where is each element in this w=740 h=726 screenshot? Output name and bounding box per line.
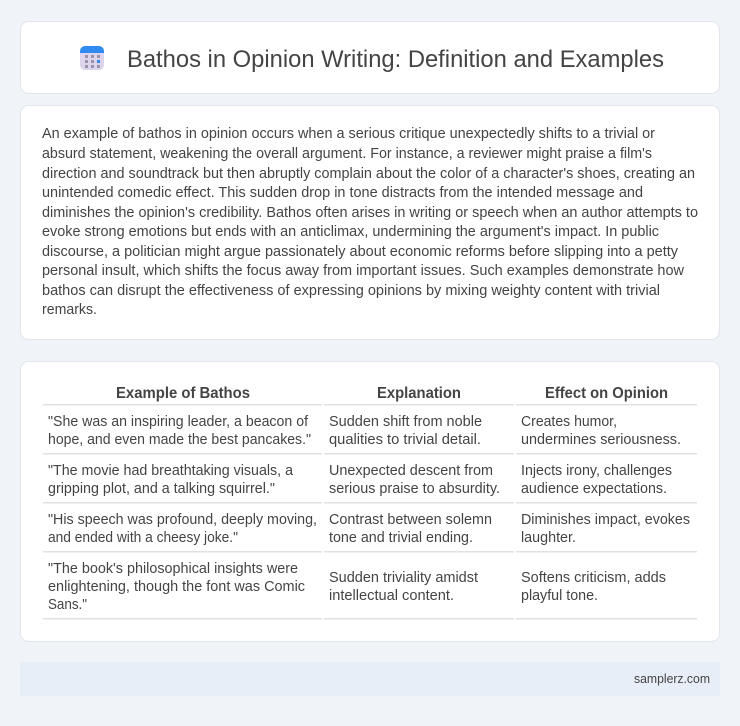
table row 3 [48, 512, 690, 546]
table row 2: "The movie had breathtaking visuals, a [48, 463, 294, 479]
text block: description paragraph: unintended comedic effect. This sudden drop in tone distracts from the intended message and [42, 185, 643, 201]
panel: description [20, 106, 720, 340]
table row 4: enlightening, though the font was Comic [48, 579, 305, 595]
table row 1: qualities to trivial detail. [329, 432, 481, 448]
table row 1: hope, and even made the best pancakes." [48, 432, 311, 448]
table row 2: serious praise to absurdity. [329, 481, 500, 497]
table header row: Effect on Opinion [545, 385, 668, 402]
text block: description paragraph [42, 126, 698, 318]
table row 4: Sans." [48, 597, 87, 613]
panel: table [20, 362, 720, 642]
footer text: samplerz.com [634, 672, 710, 686]
table row 1: "She was an inspiring leader, a beacon of [48, 414, 309, 430]
table header row: Explanation [377, 385, 461, 402]
table row 4: intellectual content. [329, 588, 454, 604]
table header row [116, 385, 668, 402]
table row 2: gripping plot, and a talking squirrel." [48, 481, 275, 497]
text block: description paragraph: bathos can disrupt the effectiveness of expressing opinions by mixing weighty content with trivial [42, 283, 660, 299]
table row 3: Contrast between solemn [329, 512, 492, 528]
panel: header [20, 22, 720, 94]
table row 3: Diminishes impact, evokes [521, 512, 690, 528]
table row 3: tone and trivial ending. [329, 530, 473, 546]
footer [20, 662, 720, 696]
table row 2: Injects irony, challenges [521, 463, 672, 479]
table row 1 [48, 414, 681, 448]
table row 1: Sudden shift from noble [329, 414, 482, 430]
text block: description paragraph: evoke strong emotions but ends with an anticlimax, undermining the argument's impact. In public [42, 224, 660, 240]
table row 2: audience expectations. [521, 481, 667, 497]
text block: description paragraph: absurd statement, weakening the overall argument. For instance, a reviewer might praise a film's [42, 146, 652, 162]
table header row: Example of Bathos [116, 385, 250, 402]
text block: description paragraph: diminishes the opinion's credibility. Bathos often arises in writing or speech when an author attempts to [42, 205, 698, 221]
table row 1: undermines seriousness. [521, 432, 681, 448]
table row 3: "His speech was profound, deeply moving, [48, 512, 317, 528]
title: Bathos in Opinion Writing: Definition and Examples [127, 46, 664, 73]
table row 4 [48, 561, 666, 613]
text block: description paragraph: An example of bathos in opinion occurs when a serious critique unexpectedly shifts to a trivial or [42, 126, 655, 142]
table row 2: Unexpected descent from [329, 463, 493, 479]
table row 3: laughter. [521, 530, 576, 546]
table row 3: and ended with a cheesy joke." [48, 530, 238, 546]
text block: description paragraph: remarks. [42, 302, 97, 318]
icon: calendar [80, 46, 104, 70]
text block: description paragraph: direction and soundtrack but then abruptly complain about the color of a character's shoes, creating an [42, 166, 695, 182]
text block: description paragraph: discourse, a politician might argue passionately about economic reforms before slipping into a petty [42, 244, 679, 260]
table row 2 [48, 463, 672, 497]
table row 1: Creates humor, [521, 414, 617, 430]
table row 4: playful tone. [521, 588, 598, 604]
table row 4: Sudden triviality amidst [329, 570, 478, 586]
text block: description paragraph: personal insult, which shifts the focus away from important issues. Such examples demonstrate how [42, 263, 684, 279]
table row 4: Softens criticism, adds [521, 570, 666, 586]
table row 4: "The book's philosophical insights were [48, 561, 298, 577]
